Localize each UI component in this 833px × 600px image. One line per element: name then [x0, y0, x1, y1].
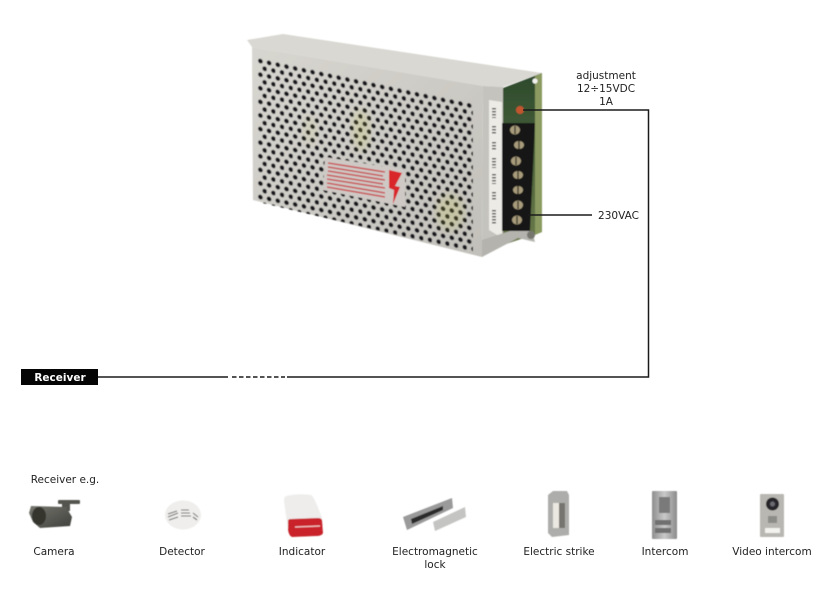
terminal block	[502, 123, 535, 231]
icon: camera	[29, 500, 80, 528]
side strip with terminal legend	[482, 86, 503, 257]
circuit board	[503, 73, 542, 245]
label: electromagnetic lock: Electromagnetic	[392, 546, 478, 558]
heading: receiver examples: Receiver e.g.	[31, 474, 99, 486]
icon: power supply unit	[247, 34, 542, 257]
label: video intercom: Video intercom	[732, 546, 812, 558]
label: adjustment: 1A	[599, 96, 614, 108]
icon: electromagnetic lock	[403, 498, 466, 531]
label: intercom: Intercom	[642, 546, 688, 558]
tinted components behind holes	[303, 110, 464, 230]
icon: electric strike	[548, 491, 569, 537]
label: electromagnetic lock: lock	[424, 559, 447, 571]
icon: indicator	[284, 494, 323, 537]
label: 230VAC: 230VAC	[598, 210, 639, 222]
icon: detector	[165, 500, 201, 530]
label: adjustment: adjustment	[576, 70, 636, 82]
label: indicator: Indicator	[279, 546, 326, 558]
wire: mains input	[528, 214, 592, 216]
receiver tag: Receiver	[34, 372, 86, 384]
receiver tag	[21, 369, 98, 385]
label: electric strike: Electric strike	[523, 546, 595, 558]
label: detector: Detector	[159, 546, 206, 558]
label: adjustment: 12÷15VDC	[577, 83, 635, 95]
label: camera: Camera	[33, 546, 75, 558]
perforated front panel	[252, 47, 483, 257]
warning label	[323, 157, 405, 207]
icon: intercom	[652, 491, 677, 539]
icon: video intercom	[760, 494, 784, 537]
top lid	[247, 34, 542, 87]
adjustment potentiometer	[516, 106, 524, 114]
wire: output to receiver	[98, 110, 648, 377]
